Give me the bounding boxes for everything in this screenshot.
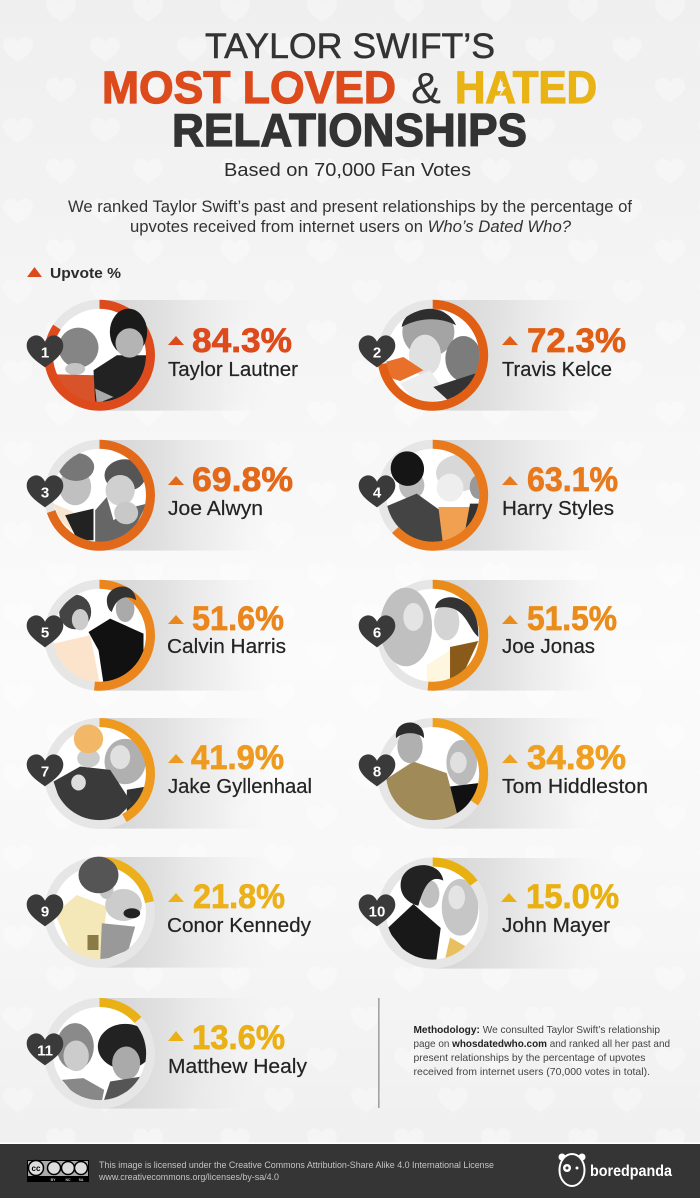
title: TAYLOR SWIFT’S bbox=[205, 27, 495, 66]
photo: Matthew Healy bbox=[57, 1023, 152, 1101]
photo: Conor Kennedy bbox=[55, 889, 142, 962]
item 2: Travis Kelce bbox=[359, 300, 626, 411]
photo: John Mayer bbox=[387, 879, 478, 962]
rank badge 6 bbox=[359, 615, 395, 647]
item 3: Joe Alwyn bbox=[27, 440, 293, 551]
methodology text: present relationships by the percentage of upvotes bbox=[414, 1053, 646, 1064]
name: Jake Gyllenhaal bbox=[168, 775, 312, 798]
item 7: Jake Gyllenhaal bbox=[27, 718, 312, 829]
title bbox=[102, 27, 597, 156]
methodology text bbox=[414, 1025, 670, 1078]
value 21.8%: 21.8% bbox=[193, 878, 285, 916]
methodology divider bbox=[378, 998, 380, 1108]
rank badge 9 bbox=[27, 894, 63, 926]
rank badge 1 bbox=[27, 335, 63, 367]
rank badge 2 bbox=[359, 335, 395, 367]
item 1: Taylor Lautner bbox=[27, 300, 298, 411]
item 4: Harry Styles bbox=[359, 440, 618, 551]
rank badge 11: 11 bbox=[37, 1042, 53, 1060]
license text: www.creativecommons.org/licenses/by-sa/4.0 bbox=[98, 1172, 279, 1182]
name: John Mayer bbox=[502, 914, 610, 937]
rank badge 7 bbox=[27, 754, 63, 786]
photo: Tom Hiddleston bbox=[385, 740, 478, 821]
photo: Joe Alwyn bbox=[54, 453, 147, 544]
name: Joe Jonas bbox=[502, 635, 595, 658]
value 51.5%: 51.5% bbox=[527, 600, 617, 638]
name: Joe Alwyn bbox=[168, 497, 263, 520]
license text bbox=[98, 1160, 494, 1182]
intro text: We ranked Taylor Swift’s past and present relationships by the percentage of bbox=[68, 198, 632, 216]
rank badge 4: 4 bbox=[373, 484, 382, 502]
value 63.1%: 63.1% bbox=[527, 461, 618, 499]
item 5: Calvin Harris bbox=[27, 580, 286, 691]
photo: Travis Kelce bbox=[385, 307, 481, 404]
rank badge 5 bbox=[27, 615, 63, 647]
item 11: Matthew Healy bbox=[27, 998, 308, 1109]
photo: Jake Gyllenhaal bbox=[54, 739, 147, 821]
rank badge 3 bbox=[27, 475, 63, 507]
value 84.3%: 84.3% bbox=[192, 322, 292, 360]
footer bar bbox=[0, 1142, 700, 1198]
value 15.0%: 15.0% bbox=[526, 878, 619, 916]
item 8: Tom Hiddleston bbox=[359, 718, 648, 829]
rank badge 8: 8 bbox=[373, 764, 381, 780]
value 72.3%: 72.3% bbox=[527, 322, 626, 360]
name: Calvin Harris bbox=[167, 635, 286, 658]
intro text bbox=[68, 198, 632, 236]
value 69.8%: 69.8% bbox=[192, 461, 293, 499]
intro text: upvotes received from internet users on Who’s Dated Who? bbox=[130, 218, 572, 236]
rank badge 3: 3 bbox=[41, 484, 49, 502]
brand name: boredpanda bbox=[590, 1163, 672, 1180]
name: Taylor Lautner bbox=[168, 358, 298, 381]
rank badge 1: 1 bbox=[41, 344, 49, 362]
item 6: Joe Jonas bbox=[359, 580, 617, 691]
rank badge 8 bbox=[359, 754, 395, 786]
rank badge 7: 7 bbox=[41, 764, 49, 780]
methodology text: received from internet users (70,000 votes in total). bbox=[414, 1067, 650, 1078]
title: MOST LOVED bbox=[102, 62, 396, 113]
photo: Calvin Harris bbox=[54, 595, 143, 684]
value 13.6%: 13.6% bbox=[192, 1019, 285, 1057]
name: Harry Styles bbox=[502, 497, 614, 520]
item 10: John Mayer bbox=[359, 858, 619, 969]
icon: creative commons badge: NC bbox=[65, 1178, 71, 1182]
rank badge 9: 9 bbox=[41, 904, 49, 920]
rank badge 4 bbox=[359, 475, 395, 507]
icon: creative commons badge bbox=[27, 1160, 89, 1182]
name: Conor Kennedy bbox=[167, 914, 312, 937]
icon: creative commons badge: cc bbox=[32, 1164, 41, 1173]
rank badge 10 bbox=[359, 894, 395, 926]
rank badge 11 bbox=[27, 1033, 63, 1065]
legend: upvote %: Upvote % bbox=[50, 265, 121, 282]
rank badge 10: 10 bbox=[369, 904, 385, 920]
rank badge 5: 5 bbox=[41, 624, 49, 642]
rank badge 2: 2 bbox=[373, 344, 381, 362]
title: & bbox=[411, 64, 441, 113]
photo: Taylor Lautner bbox=[54, 328, 148, 404]
methodology text: Methodology: We consulted Taylor Swift’s relationship bbox=[414, 1025, 660, 1036]
item 9: Conor Kennedy bbox=[27, 857, 312, 968]
name: Matthew Healy bbox=[168, 1055, 308, 1078]
icon: creative commons badge: BY bbox=[51, 1178, 56, 1182]
methodology text: page on whosdatedwho.com and ranked all her past and bbox=[414, 1039, 670, 1050]
name: Travis Kelce bbox=[502, 358, 612, 381]
rank badge 6: 6 bbox=[373, 624, 381, 642]
value 51.6%: 51.6% bbox=[192, 600, 284, 638]
license text: This image is licensed under the Creative Commons Attribution-Share Alike 4.0 International License bbox=[99, 1160, 494, 1170]
icon: creative commons badge: SA bbox=[79, 1178, 84, 1182]
name: Tom Hiddleston bbox=[502, 775, 648, 798]
photo: Harry Styles bbox=[387, 455, 480, 542]
icon: panda logo bbox=[558, 1154, 586, 1186]
title: RELATIONSHIPS bbox=[172, 104, 527, 156]
value 34.8%: 34.8% bbox=[527, 739, 626, 777]
title: HATED bbox=[455, 62, 597, 113]
subtitle: Based on 70,000 Fan Votes bbox=[224, 159, 471, 180]
photo: Joe Jonas bbox=[427, 604, 478, 684]
value 41.9%: 41.9% bbox=[191, 739, 284, 777]
